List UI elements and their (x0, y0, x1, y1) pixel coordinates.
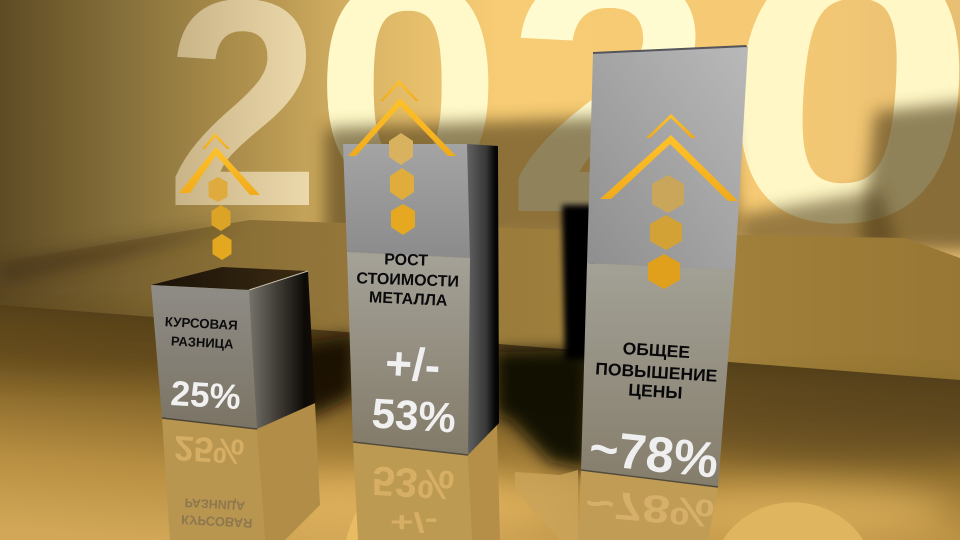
reflection: box 1: 25% (173, 428, 245, 471)
box 3 arrow icon (600, 114, 738, 289)
box 1 arrow icon (179, 133, 260, 260)
wall shadows (325, 100, 960, 250)
box 2 arrow icon (348, 80, 456, 235)
box 3 value: ~78% (587, 419, 721, 489)
reflection: box 1: КУРСОВАЯ (181, 512, 253, 531)
floor light and shade (0, 319, 960, 538)
large year 2020 (166, 0, 960, 300)
box 1 top (151, 267, 308, 290)
box 1 value: 25% (170, 374, 242, 417)
box 3 label (595, 338, 718, 403)
box 3 (581, 45, 748, 489)
box 2 label (356, 251, 459, 310)
floor (0, 305, 960, 540)
box 1 (151, 267, 315, 429)
dark cast shadows (285, 205, 600, 470)
box 3 top edge (593, 45, 748, 55)
background wall (0, 0, 960, 400)
reflection: box 2 (353, 425, 500, 540)
box 2 side (467, 144, 499, 455)
digit reflection on floor (346, 480, 863, 540)
box 2 label: СТОИМОСТИ (356, 270, 459, 291)
box 3 label: ЦЕНЫ (628, 380, 683, 403)
reflection: box 1: РАЗНИЦА (184, 495, 245, 513)
box 3 label: ОБЩЕЕ (622, 338, 691, 362)
box 2 label: МЕТАЛЛА (369, 289, 448, 310)
reflection: box 1 (162, 403, 320, 540)
box 2 value: 53% (370, 390, 457, 442)
box 3 label: ПОВЫШЕНИЕ (595, 359, 718, 386)
box 2 value (370, 337, 457, 442)
back platform (0, 220, 960, 400)
box 1 label: КУРСОВАЯ (164, 314, 238, 333)
box 2 front upper (343, 144, 470, 258)
reflection: box 2: +/- (390, 507, 438, 537)
box 3 front upper (587, 47, 748, 270)
box 3 front lower (581, 263, 735, 487)
reflection: box 2: 53% (371, 458, 456, 508)
box 1 label (164, 314, 238, 352)
box 2 front lower (347, 252, 470, 455)
box 2 label: РОСТ (384, 251, 428, 270)
box 2 (343, 144, 499, 455)
box 1 label: РАЗНИЦА (171, 333, 235, 352)
box 1 side (249, 271, 315, 429)
platform left shadow (0, 221, 250, 285)
reflection: box 3: ~78% (584, 481, 716, 536)
box 1 front (151, 285, 257, 429)
reflection: box 3 (515, 470, 718, 540)
box 2 value: +/- (384, 337, 442, 391)
